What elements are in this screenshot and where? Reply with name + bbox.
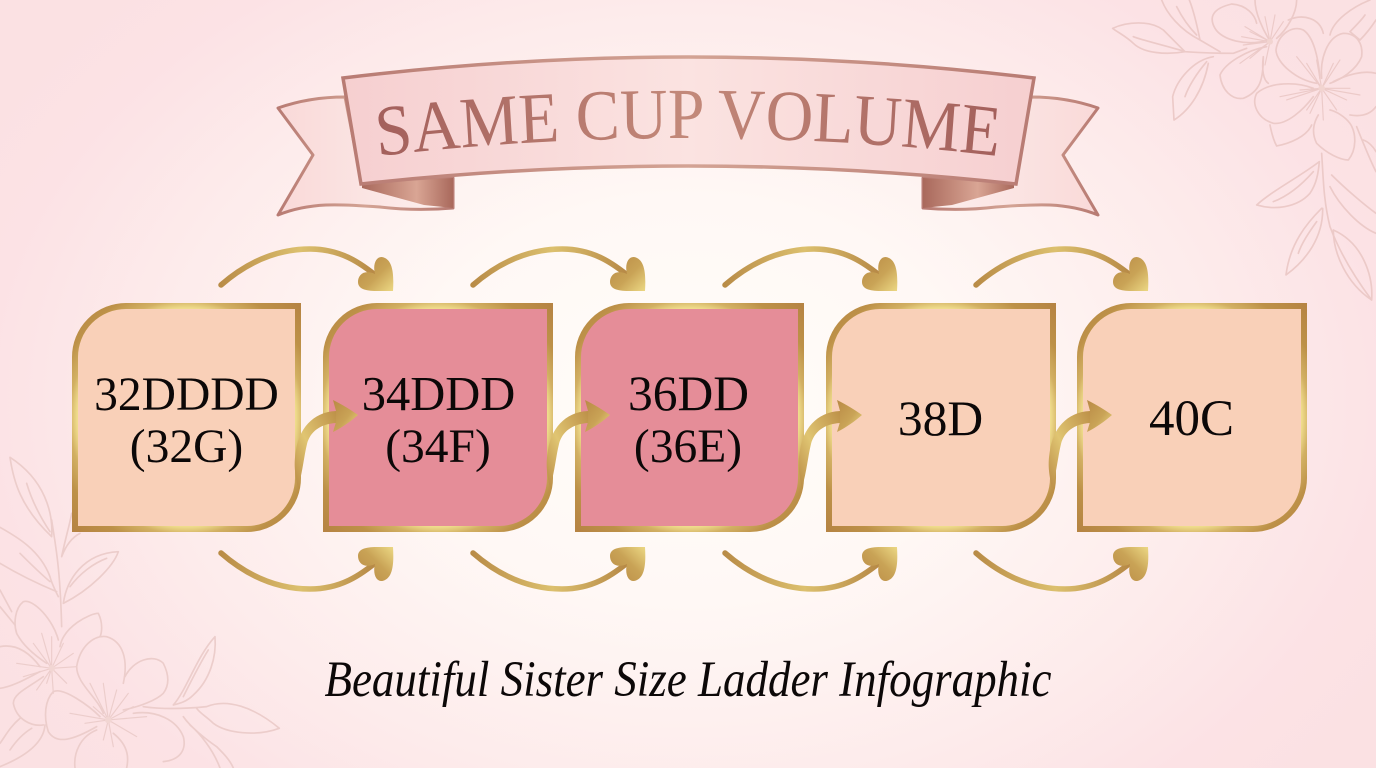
floral decoration: bottom left xyxy=(0,457,279,768)
connector arrows between boxes xyxy=(295,400,1112,488)
arrows below boxes xyxy=(221,547,1148,589)
size box: 34DDD (34F) xyxy=(326,306,550,529)
size box: 32DDDD (32G): (32G) xyxy=(130,421,243,473)
banner left tail xyxy=(278,97,453,215)
size box: 36DD (36E) xyxy=(578,306,801,529)
banner main panel xyxy=(343,57,1034,184)
banner left fold xyxy=(362,178,453,208)
size box: 40C: 40C xyxy=(1149,391,1234,447)
arrows above boxes xyxy=(221,249,1148,291)
caption: Beautiful Sister Size Ladder Infographic xyxy=(324,652,1052,708)
title banner xyxy=(276,55,1100,216)
banner right tail xyxy=(923,97,1098,215)
size box: 38D: 38D xyxy=(898,391,983,446)
banner right fold xyxy=(923,178,1014,208)
size box: 36DD (36E): (36E) xyxy=(634,421,742,473)
size box: 36DD (36E): 36DD xyxy=(628,366,749,421)
floral decoration: top right xyxy=(1113,0,1376,300)
size box: 40C xyxy=(1080,306,1304,529)
size box: 32DDDD (32G): 32DDDD xyxy=(94,369,279,421)
size box: 34DDD (34F): 34DDD xyxy=(362,368,515,421)
size box: 32DDDD (32G) xyxy=(75,306,298,529)
size box: 38D xyxy=(829,306,1053,529)
size box: 34DDD (34F): (34F) xyxy=(385,421,491,473)
title: SAME CUP VOLUME xyxy=(378,90,997,156)
